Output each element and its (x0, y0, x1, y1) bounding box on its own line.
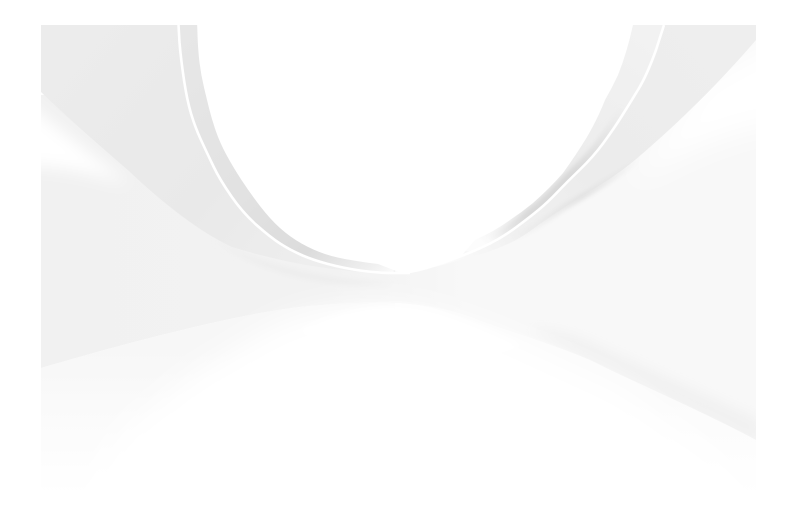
left curved panel (41, 25, 228, 226)
soft glow below the hump on the right (395, 303, 756, 505)
right white slit (395, 25, 664, 273)
left darker inner band (236, 189, 394, 272)
left white slit (178, 25, 410, 273)
right lighter inner band (430, 25, 664, 252)
abstract background artwork (41, 25, 756, 440)
soft white highlight under left panel (41, 118, 100, 172)
shadow streak below the left curve (215, 240, 395, 285)
white hump crown (300, 305, 520, 362)
right panel stippled lower shadow (545, 176, 616, 221)
soft glow below the hump on the left (41, 303, 395, 505)
soft shadow above the right side of the hump (530, 328, 760, 445)
right curved panel (395, 25, 756, 274)
mid grey field between the curves and the hump (41, 95, 446, 368)
white hump at the bottom (60, 305, 770, 527)
soft white highlight under right panel (630, 20, 791, 185)
white opening of the ring (197, 20, 634, 272)
right band dark edge along the slit (502, 134, 607, 234)
